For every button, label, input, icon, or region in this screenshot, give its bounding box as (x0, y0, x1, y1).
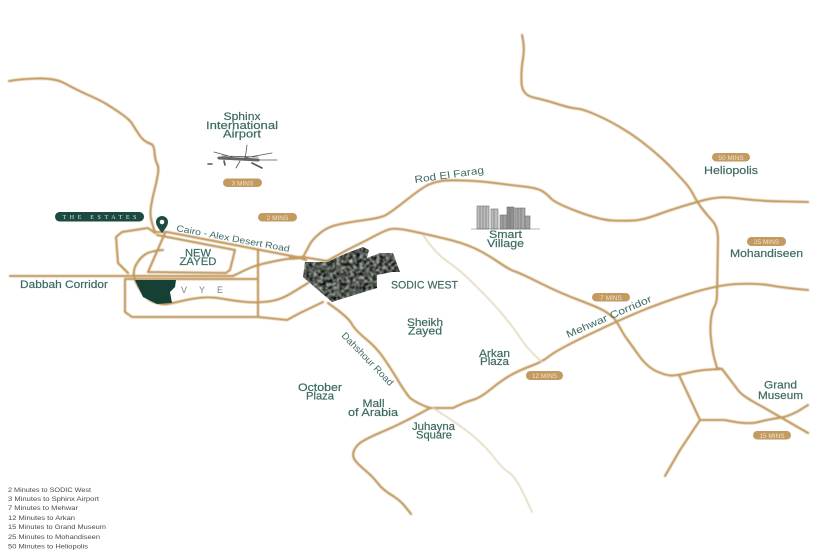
label: Smart Village (487, 229, 524, 250)
SODIC West aerial plot (303, 247, 400, 302)
label: Arkan Plaza: Arkan (479, 348, 510, 360)
label: Heliopolis: Heliopolis (704, 165, 759, 177)
legend: travel times: 12 Minutes to Arkan (8, 516, 75, 522)
road: outer west block (116, 228, 155, 273)
label: Mall of Arabia: Mall (362, 398, 384, 410)
label: Sheikh Zayed: Sheikh (407, 317, 443, 329)
road: SODIC West north road (303, 229, 722, 376)
label: New Zayed: ZAYED (180, 256, 217, 268)
label: Mehwar Corridor: Mehwar Corridor (565, 294, 654, 341)
travel time badges (223, 153, 791, 440)
road: light track north (423, 235, 542, 362)
road: south VYE block (125, 279, 323, 320)
badge: The Estates: THE ESTATES (62, 215, 136, 221)
road: northern ring (521, 35, 718, 368)
label: Sphinx International Airport: Sphinx (224, 111, 261, 123)
legend: travel times: 3 Minutes to Sphinx Airport (8, 497, 99, 503)
label: Juhayna Square: Square (416, 430, 452, 442)
label: October Plaza (298, 382, 342, 402)
badge: 3 mins (223, 178, 262, 187)
icon: airplane (208, 145, 277, 168)
label: Arkan Plaza (479, 348, 510, 368)
label: Smart Village: Smart (489, 229, 522, 241)
badge: 3 mins: 3 MINS (232, 180, 254, 187)
badge: 7 mins: 7 MINS (600, 295, 622, 302)
road: Rod El Farag (290, 180, 808, 257)
badge: 25 mins (747, 237, 786, 246)
label: Smart Village: Village (487, 238, 524, 250)
label: Sphinx International Airport: Airport (223, 128, 261, 140)
label: Sphinx International Airport: International (206, 120, 278, 132)
road: Dabbah service road (125, 278, 258, 280)
label: Juhayna Square (412, 421, 456, 442)
label: New Zayed: NEW (185, 248, 212, 260)
legend: travel times: 7 Minutes to Mehwar (8, 506, 78, 512)
label: Sheikh Zayed (407, 317, 443, 338)
road: arc and VYE south edge (134, 250, 308, 304)
VYE plot (135, 280, 176, 304)
label: Sphinx International Airport (206, 111, 278, 140)
location labels (20, 111, 803, 442)
road: New Zayed loop (148, 233, 235, 273)
badge: 12 mins: 12 MINS (532, 373, 558, 380)
label: Cairo Alex Desert Road: Cairo - Alex Desert Road (176, 223, 291, 254)
legend: travel times: 15 Minutes to Grand Museum (8, 525, 106, 531)
badge: 2 mins (258, 213, 297, 222)
badge: 15 mins (753, 431, 791, 440)
legend: travel times: 2 Minutes to SODIC West (8, 488, 91, 494)
label: VYE: V Y E (181, 285, 223, 295)
road: northern link to desert road (9, 78, 158, 232)
badge: 15 mins: 15 MINS (759, 433, 785, 440)
label: Mohandiseen: Mohandiseen (730, 248, 803, 260)
badge: 12 mins (526, 371, 563, 380)
label: Mall of Arabia: of Arabia (348, 407, 399, 419)
road: light track south (433, 408, 532, 512)
badge: 50 mins (712, 153, 750, 162)
label: Juhayna Square: Juhayna (412, 421, 456, 433)
label: Dabbah Corridor: Dabbah Corridor (20, 279, 108, 291)
label: Grand Museum (758, 380, 803, 402)
road: Cairo Alex Desert Road (155, 232, 306, 260)
label: Sheikh Zayed: Zayed (408, 326, 442, 338)
label: October Plaza: Plaza (306, 390, 335, 402)
label: Rod El Farag: Rod El Farag (414, 165, 485, 186)
icon: Smart Village towers (471, 206, 540, 229)
label: SODIC West: SODIC WEST (391, 280, 458, 292)
label: Mall of Arabia (348, 398, 399, 419)
label: Grand Museum: Grand (764, 380, 797, 392)
label: New Zayed (180, 248, 217, 268)
legend: travel times: 50 Minutes to Heliopolis (8, 544, 88, 550)
badge: The Estates (55, 212, 144, 222)
badge: 2 mins: 2 MINS (267, 215, 289, 222)
legend: travel times (8, 488, 106, 550)
road: cross street (257, 250, 259, 317)
road: Mehwar Corridor (430, 284, 808, 408)
label: Arkan Plaza: Plaza (480, 356, 510, 368)
road: Juhayna south road (353, 408, 430, 514)
legend: travel times: 25 Minutes to Mohandiseen (8, 535, 100, 541)
label: Grand Museum: Museum (758, 390, 803, 402)
road: southeast connector (665, 375, 808, 476)
label: October Plaza: October (298, 382, 342, 394)
badge: 50 mins: 50 MINS (718, 155, 744, 162)
badge: 25 mins: 25 MINS (754, 239, 780, 246)
location pin (156, 216, 168, 233)
road: Dabbah Corridor (10, 258, 303, 276)
road: Dahshour Road (328, 303, 430, 408)
road: Grand Museum road (717, 368, 808, 433)
badge: 7 mins (592, 293, 630, 302)
label: Dahshour Road: Dahshour Road (339, 330, 395, 388)
